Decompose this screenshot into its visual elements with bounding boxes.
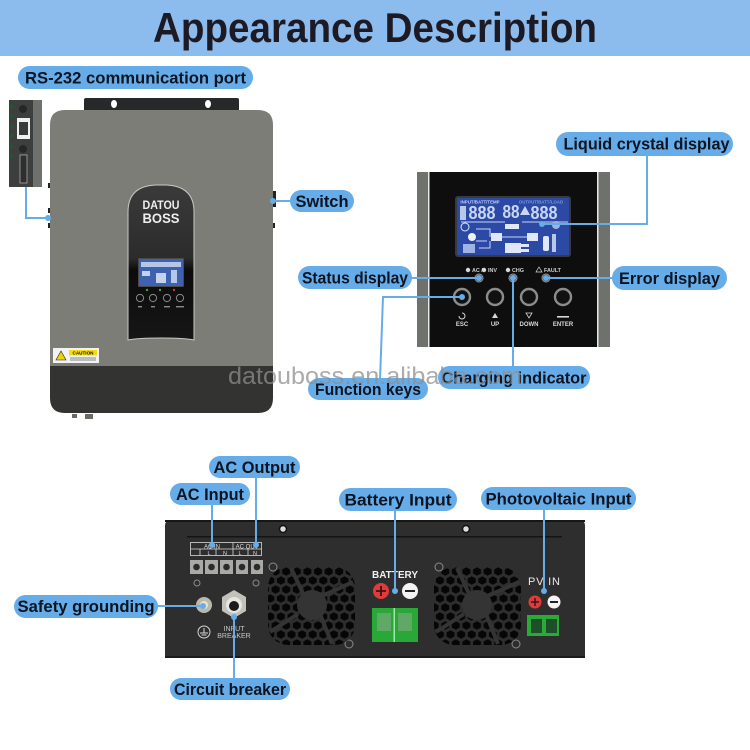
indicator labels bbox=[466, 267, 562, 274]
ground symbol bbox=[198, 626, 210, 638]
small screws bbox=[194, 563, 520, 648]
logo: DATOU bbox=[142, 198, 180, 212]
small indicators bbox=[146, 289, 175, 291]
small buttons bbox=[136, 294, 184, 302]
terminal label: L bbox=[207, 551, 211, 557]
control panel bbox=[128, 185, 194, 340]
breaker caption bbox=[217, 626, 251, 640]
small LCD bbox=[138, 258, 184, 287]
battery terminal: BATTERY bbox=[372, 570, 418, 581]
indicator labels: AC / bbox=[472, 268, 483, 274]
terminal label: AC OUT bbox=[236, 544, 259, 550]
LCD screen: 888 bbox=[530, 203, 558, 223]
breaker caption: INPUT bbox=[224, 626, 245, 633]
header band bbox=[0, 0, 750, 56]
left fan bbox=[268, 567, 355, 645]
LCD screen: 88 bbox=[502, 202, 520, 222]
side knobs bbox=[48, 183, 276, 228]
indicator labels: FAULT bbox=[544, 268, 562, 274]
housing grey bbox=[50, 110, 273, 366]
label: Photovoltaic Input: Photovoltaic Input bbox=[486, 490, 632, 508]
rear view of inverter bbox=[165, 520, 585, 658]
caution label bbox=[53, 348, 99, 363]
label: Liquid crystal display: Liquid crystal display bbox=[564, 134, 730, 154]
button captions: ENTER bbox=[553, 322, 574, 328]
watermark: datouboss.en.alibaba.com bbox=[228, 363, 522, 390]
screws bbox=[280, 526, 470, 532]
LCD screen bbox=[455, 196, 571, 257]
front view of inverter bbox=[48, 98, 276, 419]
label: AC Output: AC Output bbox=[214, 458, 296, 477]
small button captions bbox=[138, 306, 184, 307]
terminal label: L bbox=[238, 551, 242, 557]
terminal label: N bbox=[223, 551, 227, 557]
terminal blocks bbox=[190, 560, 263, 574]
buttons bbox=[454, 289, 571, 305]
grounding post bbox=[196, 597, 212, 613]
PV terminal bbox=[527, 576, 560, 636]
button captions: ESC bbox=[456, 322, 469, 328]
label: Error display: Error display bbox=[619, 269, 721, 288]
button captions bbox=[456, 313, 574, 328]
right fan bbox=[434, 567, 521, 645]
logo: BOSS bbox=[142, 210, 180, 226]
LCD screen: 888 bbox=[468, 203, 496, 223]
label: AC Input: AC Input bbox=[176, 485, 244, 504]
terminal label: AC IN bbox=[204, 544, 220, 550]
LCD screen: INPUT/BATT/TEMP bbox=[460, 200, 500, 204]
input breaker bbox=[222, 590, 246, 618]
label: Safety grounding: Safety grounding bbox=[18, 597, 154, 616]
logo bbox=[142, 198, 180, 226]
breaker caption: BREAKER bbox=[217, 633, 251, 640]
inset: RS-232 port bbox=[9, 100, 42, 187]
label: Switch: Switch bbox=[296, 192, 348, 211]
label: Status display: Status display bbox=[302, 268, 408, 288]
indicator labels: CHG bbox=[512, 268, 524, 274]
label: RS-232 communication port: RS-232 communication port bbox=[25, 68, 246, 88]
bracket holes bbox=[111, 100, 211, 108]
button captions: DOWN bbox=[520, 322, 538, 328]
serial socket bbox=[20, 155, 27, 183]
indicator labels: INV bbox=[488, 268, 497, 274]
label: Charging indicator: Charging indicator bbox=[442, 368, 587, 388]
bottom connectors bbox=[72, 414, 93, 419]
caution label: CAUTION bbox=[73, 351, 94, 356]
button captions: UP bbox=[491, 322, 499, 328]
ethernet socket bbox=[17, 118, 30, 139]
terminal label bbox=[190, 542, 262, 557]
mounting bracket bbox=[84, 98, 239, 110]
battery terminal bbox=[372, 570, 418, 642]
LCD control panel detail bbox=[417, 172, 610, 347]
label: Circuit breaker: Circuit breaker bbox=[174, 680, 286, 699]
LCD screen: OUTPUT/BATT/LOAD bbox=[519, 200, 563, 204]
leader lines and dots bbox=[26, 144, 730, 680]
title: Appearance Description bbox=[153, 4, 597, 51]
terminal label: N bbox=[253, 551, 257, 557]
label: Battery Input: Battery Input bbox=[344, 490, 452, 510]
label: Function keys: Function keys bbox=[315, 380, 421, 399]
housing dark base bbox=[50, 366, 273, 413]
indicator lamps bbox=[475, 274, 550, 282]
PV terminal: PV IN bbox=[528, 576, 560, 588]
